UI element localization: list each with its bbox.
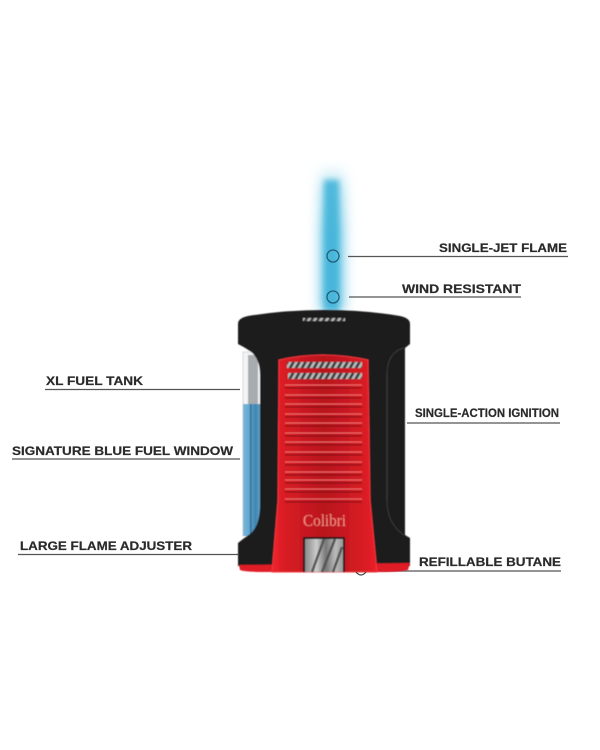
label: large flame adjuster: LARGE FLAME ADJUSTER bbox=[20, 539, 192, 553]
label: single-jet flame: SINGLE-JET FLAME bbox=[439, 241, 567, 255]
fuel window bbox=[243, 352, 261, 536]
red front panel bbox=[272, 355, 377, 572]
label: single-jet flame bbox=[327, 241, 568, 262]
label: xl fuel tank: XL FUEL TANK bbox=[46, 374, 143, 388]
label: wind resistant bbox=[327, 282, 522, 303]
flame bbox=[320, 165, 344, 311]
lighter bbox=[238, 310, 410, 572]
label: single-action ignition: SINGLE-ACTION IGNITION bbox=[415, 406, 559, 420]
lighter body bbox=[238, 310, 410, 566]
top vent mark bbox=[303, 318, 345, 321]
brand logo: Colibri bbox=[303, 511, 346, 530]
label: wind resistant: WIND RESISTANT bbox=[402, 282, 522, 296]
label: signature blue fuel window: SIGNATURE BLUE FUEL WINDOW bbox=[12, 444, 234, 458]
mesh vents bbox=[287, 362, 362, 379]
ribs bbox=[285, 385, 362, 502]
body side contour bbox=[387, 348, 404, 535]
flame adjuster wheel bbox=[303, 537, 345, 572]
label: refillable butane: REFILLABLE BUTANE bbox=[419, 555, 561, 569]
refill valve bbox=[356, 572, 366, 575]
red base strip bbox=[239, 563, 410, 572]
